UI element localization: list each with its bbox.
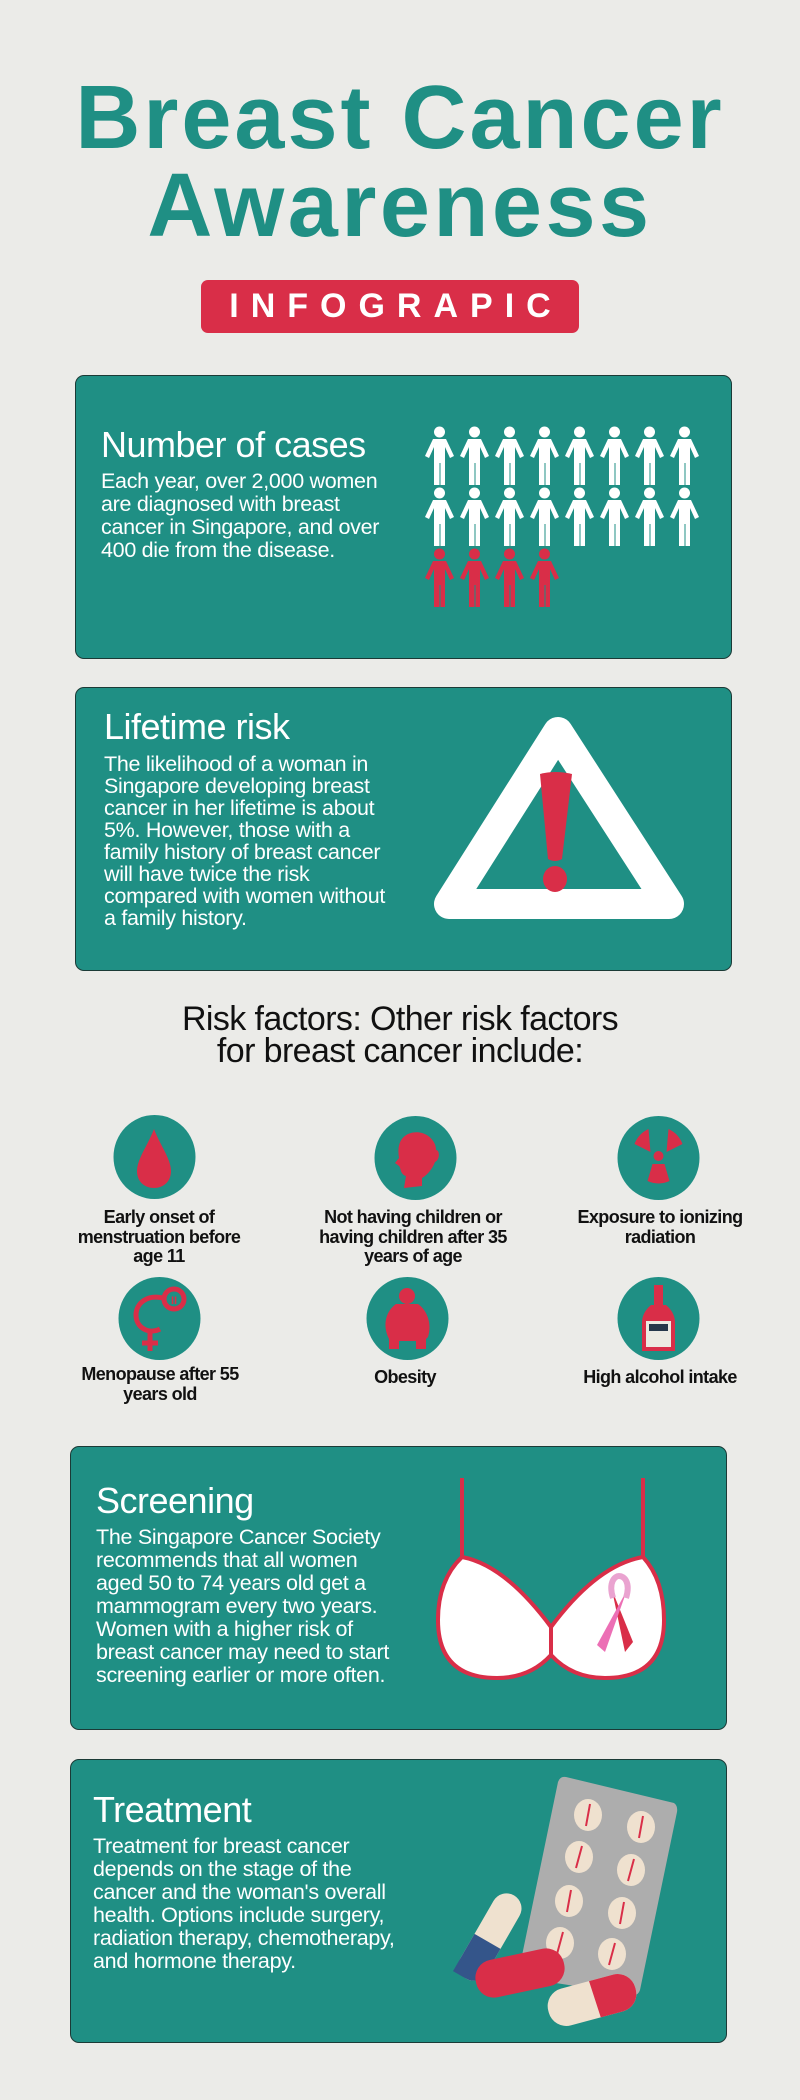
heading: risk factors: for breast cancer include: [217, 1032, 583, 1070]
badge: infographic: INFOGRAPIC [229, 287, 563, 325]
heading: screening: Screening [96, 1480, 254, 1521]
label: children [319, 1207, 507, 1266]
text: treatment: health. Options include surgery, [93, 1903, 384, 1927]
heading: lifetime risk: Lifetime risk [104, 706, 290, 747]
text: lifetime risk [104, 752, 386, 930]
label: menstruation: menstruation before [78, 1226, 240, 1246]
icon: bra with ribbon [436, 1478, 666, 1680]
text: lifetime risk: compared with women without [104, 884, 385, 908]
icon: radiation [618, 1116, 700, 1200]
text: treatment: radiation therapy, chemotherapy, [93, 1926, 395, 1950]
text: screening: breast cancer may need to start [96, 1640, 389, 1664]
text: lifetime risk: The likelihood of a woman in [104, 752, 368, 776]
text: cases: Each year, over 2,000 women [101, 469, 377, 493]
label: children: years of age [364, 1246, 462, 1266]
text: screening: screening earlier or more often. [96, 1663, 385, 1687]
label: menopause: years old [123, 1384, 197, 1404]
title: Awareness [147, 156, 653, 256]
text: treatment: and hormone therapy. [93, 1949, 296, 1973]
text: screening: recommends that all women [96, 1548, 357, 1572]
text: lifetime risk: cancer in her lifetime is about [104, 796, 374, 820]
label: menstruation: Early onset of [104, 1207, 214, 1227]
text: cases: cancer in Singapore, and over [101, 515, 379, 539]
icon: warning triangle [434, 717, 684, 919]
text: treatment [93, 1834, 395, 1973]
text: screening: aged 50 to 74 years old get a [96, 1571, 366, 1595]
title: Breast Cancer [75, 68, 725, 168]
text: cases [101, 469, 380, 562]
text: screening: mammogram every two years. [96, 1594, 377, 1618]
heading: number of cases: Number of cases [101, 424, 366, 465]
label: radiation: Exposure to ionizing [577, 1207, 743, 1227]
heading: risk factors [182, 1000, 618, 1070]
text: lifetime risk: will have twice the risk [104, 862, 309, 886]
panel: screening [70, 1446, 727, 1730]
label: radiation [577, 1207, 743, 1246]
text: screening: The Singapore Cancer Society [96, 1525, 380, 1549]
label: menopause [81, 1364, 239, 1404]
label: obesity: Obesity [374, 1367, 436, 1387]
text: lifetime risk: 5%. However, those with a [104, 818, 350, 842]
label: alcohol: High alcohol intake [583, 1367, 737, 1387]
icon: gender symbol [118, 1277, 200, 1360]
icon: obesity figure [366, 1277, 448, 1360]
text: treatment: cancer and the woman's overall [93, 1880, 386, 1904]
title [75, 68, 725, 256]
label: radiation: radiation [625, 1226, 695, 1246]
panel: number of cases [75, 375, 732, 659]
label: children: Not having children or [324, 1207, 502, 1227]
icon: gender symbol: II [171, 1295, 177, 1307]
label: menopause: Menopause after 55 [81, 1364, 239, 1384]
text: cases: are diagnosed with breast [101, 492, 340, 516]
heading: treatment: Treatment [93, 1789, 251, 1830]
text: screening [96, 1525, 390, 1687]
icon: blood drop [114, 1115, 196, 1199]
panel: treatment [70, 1759, 727, 2043]
text: cases: 400 die from the disease. [101, 538, 335, 562]
label: menstruation [78, 1207, 240, 1266]
badge: infographic [201, 280, 579, 333]
icon: people pictogram [425, 426, 699, 607]
heading: risk factors: Risk factors: Other risk factors [182, 1000, 618, 1038]
panel: lifetime risk [75, 687, 732, 971]
label: menstruation: age 11 [133, 1246, 185, 1266]
text: lifetime risk: a family history. [104, 906, 247, 930]
icon: alcohol bottle [618, 1277, 700, 1360]
text: lifetime risk: Singapore developing breast [104, 774, 370, 798]
text: treatment: Treatment for breast cancer [93, 1834, 349, 1858]
text: treatment: depends on the stage of the [93, 1857, 351, 1881]
text: lifetime risk: family history of breast cancer [104, 840, 380, 864]
label: children: having children after 35 [319, 1226, 507, 1246]
icon: head silhouette [374, 1116, 456, 1200]
text: screening: Women with a higher risk of [96, 1617, 353, 1641]
